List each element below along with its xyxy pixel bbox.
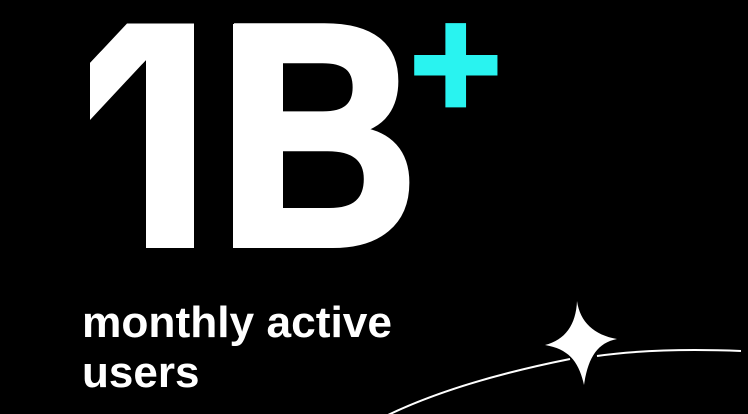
caption: monthly active users: monthly active [82, 298, 392, 347]
headline statistic: 1B+ [90, 23, 498, 248]
caption: monthly active users [82, 298, 392, 397]
orbit curve [388, 350, 741, 414]
icon: four-point sparkle star [545, 301, 617, 385]
caption: monthly active users: users [82, 348, 199, 397]
